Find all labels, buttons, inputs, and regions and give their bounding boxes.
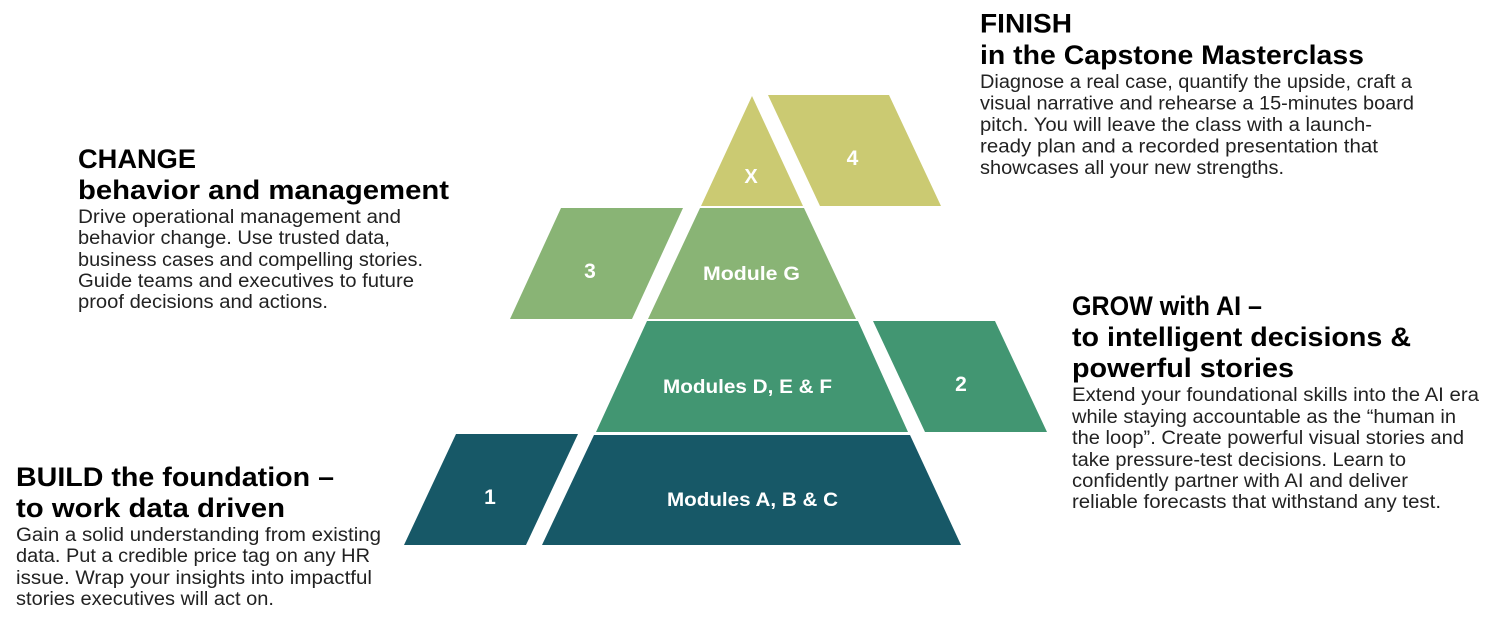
body: CHANGE <box>78 207 423 313</box>
body: FINISH: showcases all your new strengths. <box>980 158 1284 179</box>
body: GROW: confidently partner with AI and deliver <box>1072 471 1409 492</box>
heading: CHANGE <box>78 144 449 205</box>
pyramid tier: Modules A, B & C <box>542 435 961 545</box>
body: CHANGE: Drive operational management and <box>78 207 401 228</box>
pyramid tier: X <box>701 96 803 206</box>
body: GROW: take pressure-test decisions. Learn to <box>1072 450 1406 471</box>
body: GROW: while staying accountable as the “human in <box>1071 407 1456 428</box>
heading: BUILD: BUILD the foundation – <box>16 462 334 492</box>
step tab: 2 <box>873 321 1047 432</box>
pyramid tier: Modules D, E & F: Modules D, E & F <box>663 377 832 398</box>
heading: FINISH: in the Capstone Masterclass <box>980 40 1364 70</box>
pyramid tier: X: X <box>744 166 758 188</box>
step tab: 2: 2 <box>955 373 967 396</box>
heading: GROW: to intelligent decisions & <box>1072 322 1411 352</box>
text block: GROW <box>1071 291 1479 513</box>
body: CHANGE: Guide teams and executives to future <box>78 271 414 292</box>
body: BUILD: data. Put a credible price tag on any HR <box>16 546 370 567</box>
step tab: 1 <box>404 434 578 545</box>
heading: BUILD <box>16 462 334 523</box>
heading: FINISH: FINISH <box>980 8 1072 38</box>
body: CHANGE: behavior change. Use trusted data, <box>78 228 390 249</box>
body: FINISH <box>980 72 1414 179</box>
heading: GROW: GROW with AI – <box>1072 291 1262 321</box>
body: BUILD <box>16 525 381 610</box>
body: CHANGE: proof decisions and actions. <box>78 292 328 313</box>
body: BUILD: Gain a solid understanding from existing <box>16 525 381 546</box>
pyramid tier: Module G <box>648 208 856 319</box>
body: GROW: the loop”. Create powerful visual stories and <box>1072 428 1464 449</box>
text block: FINISH <box>980 8 1414 179</box>
heading: GROW: powerful stories <box>1072 353 1294 383</box>
step tab: 4 <box>768 95 941 206</box>
pyramid tier: Module G: Module G <box>703 264 800 285</box>
body: BUILD: issue. Wrap your insights into impactful <box>16 568 372 589</box>
body: GROW <box>1071 385 1479 513</box>
heading: CHANGE: behavior and management <box>78 175 449 205</box>
body: FINISH: visual narrative and rehearse a 15-minutes board <box>980 94 1414 114</box>
pyramid tier: Modules D, E & F <box>596 321 908 432</box>
body: GROW: reliable forecasts that withstand any test. <box>1072 492 1441 513</box>
step tab: 4: 4 <box>847 147 859 170</box>
body: CHANGE: business cases and compelling stories. <box>78 250 423 271</box>
pyramid diagram <box>404 95 1047 545</box>
body: GROW: Extend your foundational skills into the AI era <box>1072 385 1479 406</box>
heading: GROW <box>1072 291 1411 383</box>
step tab: 1: 1 <box>484 486 496 509</box>
heading: BUILD: to work data driven <box>16 493 285 523</box>
heading: CHANGE: CHANGE <box>78 144 196 174</box>
body: FINISH: Diagnose a real case, quantify the upside, craft a <box>980 72 1412 93</box>
text block: CHANGE <box>78 144 449 313</box>
heading: FINISH <box>980 8 1364 70</box>
step tab: 3 <box>510 208 683 319</box>
body: FINISH: pitch. You will leave the class with a launch- <box>980 115 1372 136</box>
step tab: 3: 3 <box>584 260 596 283</box>
text block: BUILD <box>16 462 381 610</box>
body: FINISH: ready plan and a recorded presentation that <box>980 136 1379 158</box>
body: BUILD: stories executives will act on. <box>16 589 274 610</box>
pyramid tier: Modules A, B & C: Modules A, B & C <box>667 490 838 511</box>
